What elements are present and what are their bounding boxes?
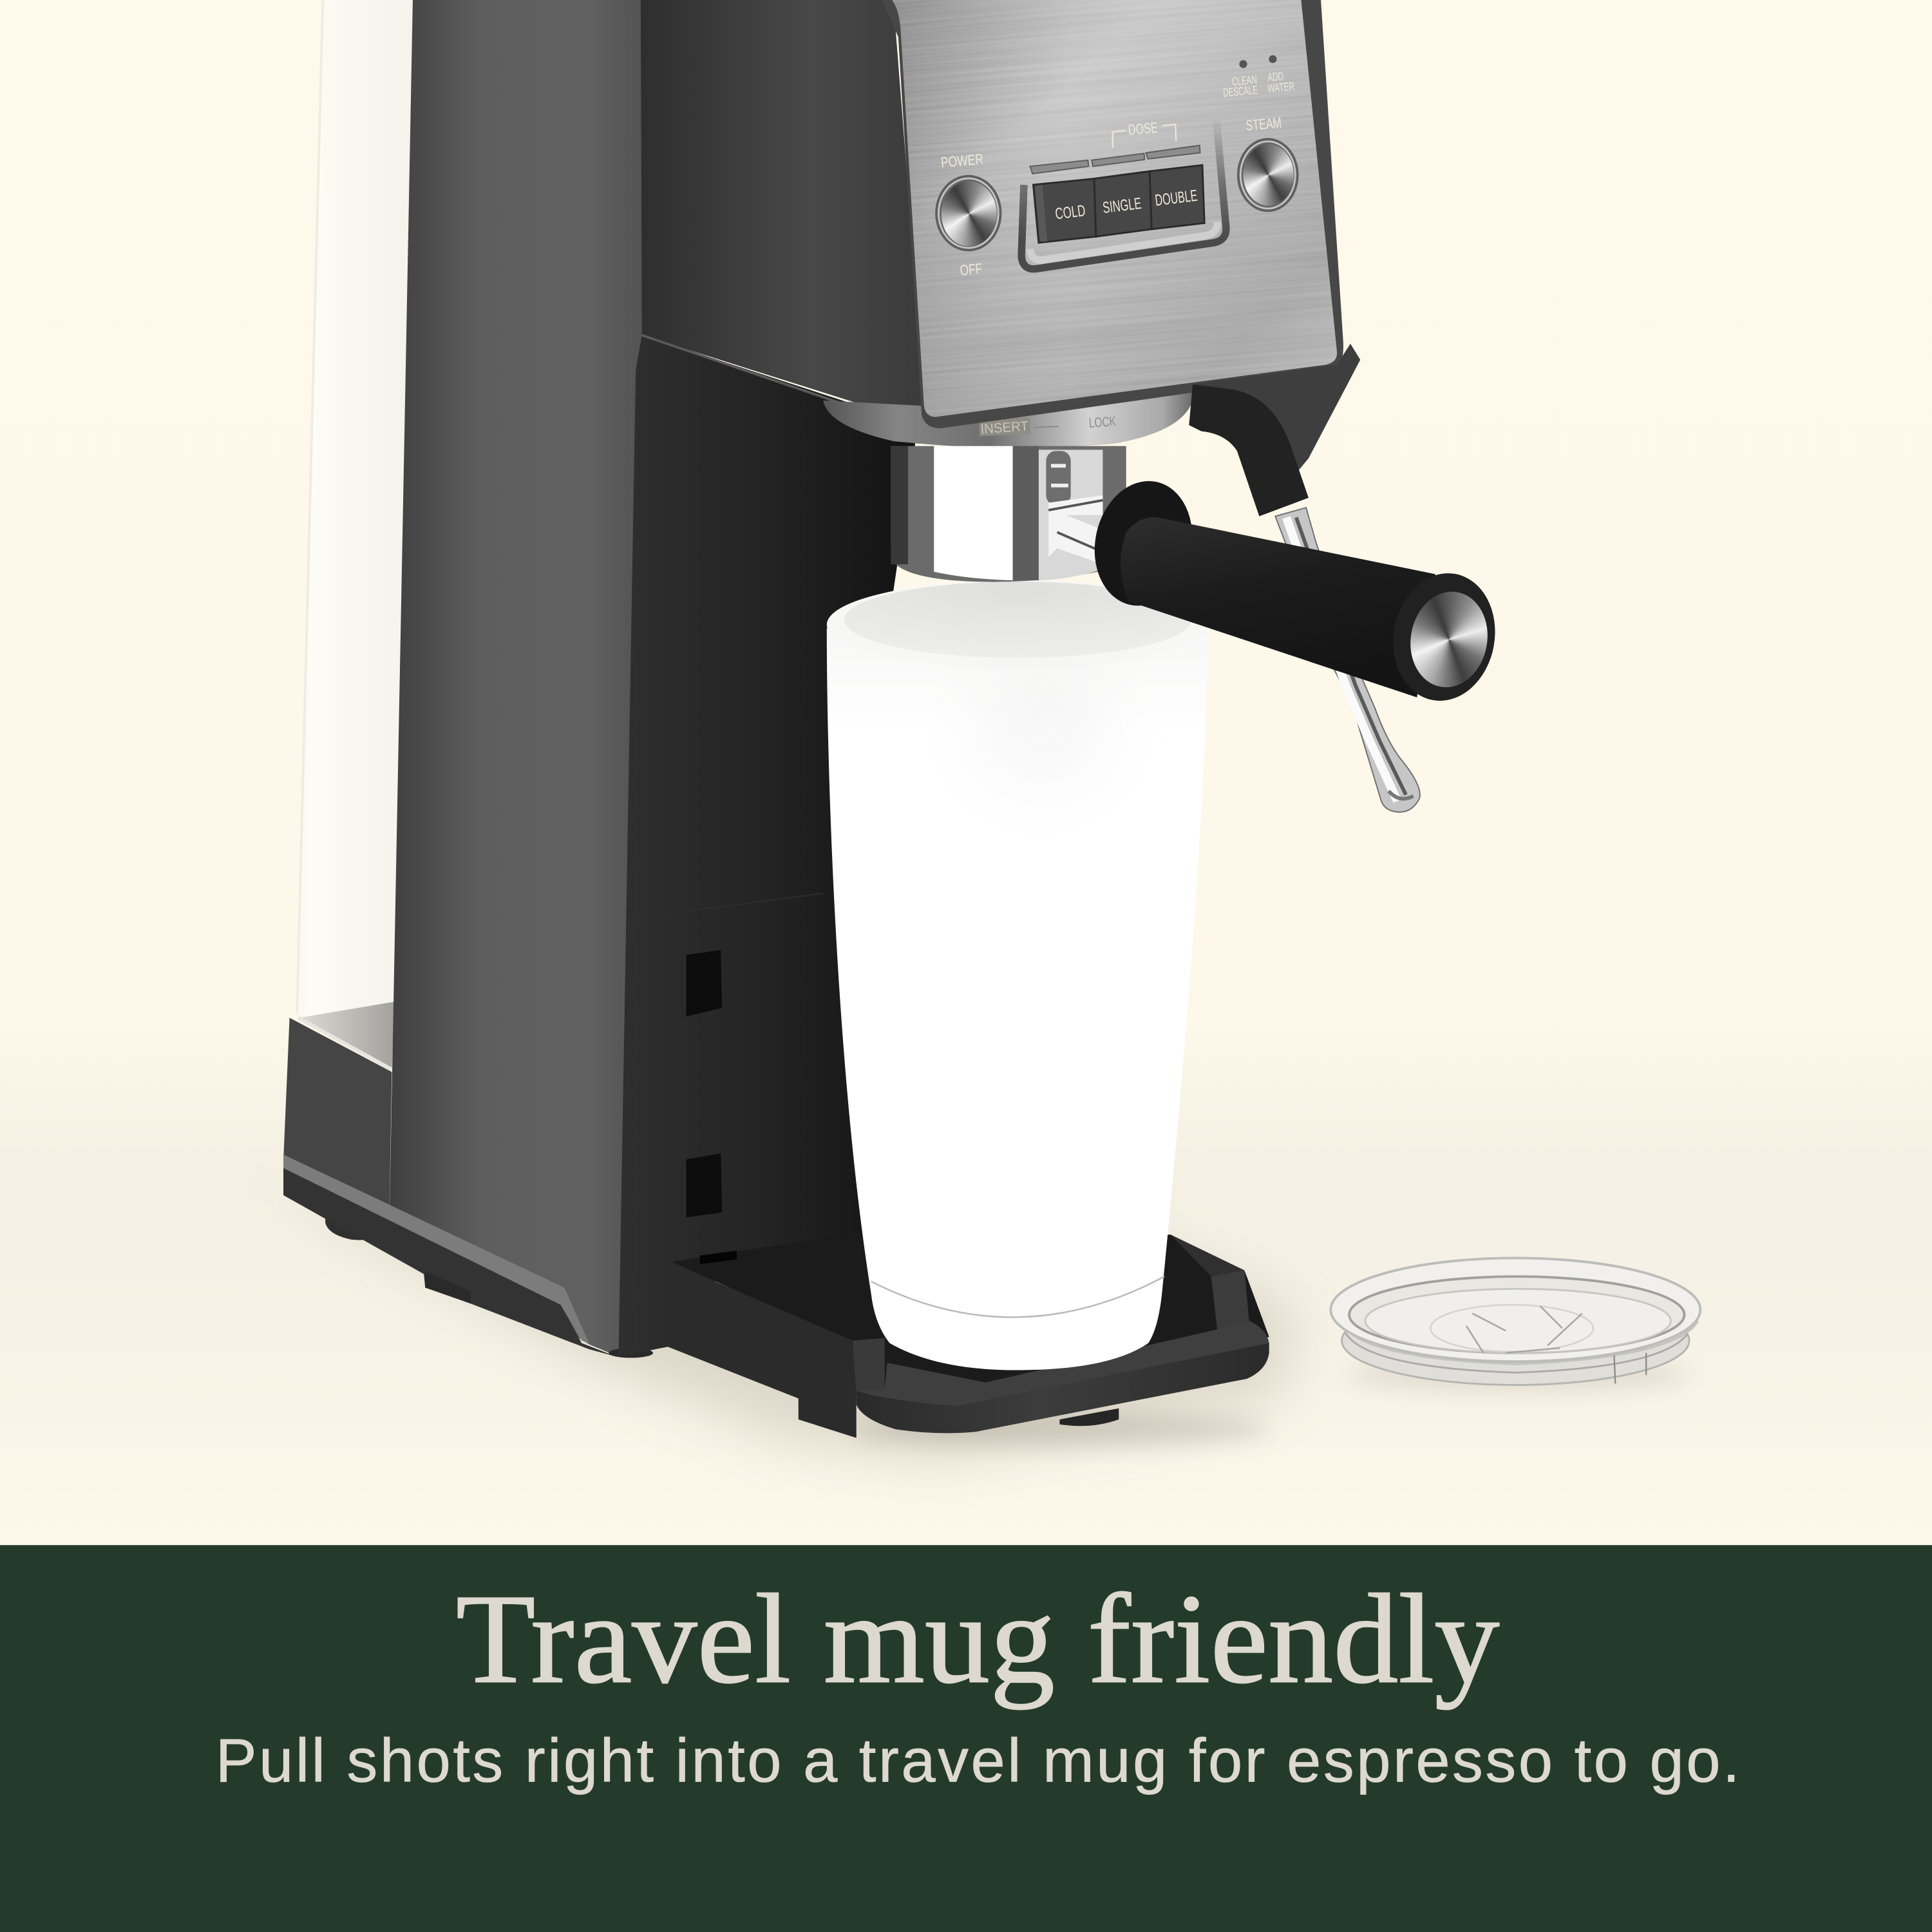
button: double (1150, 165, 1204, 229)
group head collar (823, 376, 1193, 448)
power knob (935, 175, 1001, 251)
collar labels: LOCK (1088, 414, 1117, 431)
panel labels: DOSE (1128, 119, 1159, 138)
collar labels (980, 414, 1117, 437)
floor shadows (277, 1183, 1690, 1460)
clear travel mug lid (1331, 1258, 1700, 1385)
panel labels: DESCALE (1222, 84, 1258, 99)
tray right post (1171, 1235, 1249, 1331)
button: cold: COLD (1054, 202, 1086, 223)
white travel mug (827, 580, 1208, 1370)
indicator lights (1239, 55, 1277, 68)
machine head (641, 0, 927, 431)
rear foot (325, 1214, 376, 1240)
bottom banner (0, 1545, 1932, 1932)
panel labels: WATER (1267, 80, 1295, 95)
chrome portafilter basket (891, 446, 1126, 582)
panel labels: STEAM (1245, 114, 1282, 134)
subtitle: Pull shots right into a travel mug for espresso to go. (216, 1727, 1740, 1795)
tray left rail (668, 1262, 885, 1438)
handle grip (1121, 517, 1435, 697)
steam arm bracket (1189, 344, 1360, 516)
panel labels (940, 70, 1295, 279)
collar labels: INSERT (980, 419, 1029, 437)
steam knob (1237, 138, 1299, 212)
mug base seam (871, 1276, 1164, 1317)
drip tray (668, 1232, 1269, 1438)
tray front face (857, 1343, 1269, 1433)
button: single (1094, 171, 1151, 236)
tray rim (857, 1321, 1269, 1407)
mug interior (844, 582, 1191, 658)
slot: upper tray mount (687, 950, 722, 1016)
panel labels: OFF (960, 260, 983, 279)
slot: lower tray mount (687, 1153, 722, 1217)
machine side panel (390, 0, 653, 1357)
base plinth with grey strip (283, 1155, 653, 1358)
tank base (283, 1018, 392, 1214)
button: single: SINGLE (1102, 194, 1142, 217)
panel labels: ADD (1267, 70, 1284, 84)
handle end cap (1383, 565, 1505, 709)
steel panel bezel (882, 0, 1343, 428)
machine front wall (618, 335, 918, 1357)
portafilter handle (1083, 472, 1505, 709)
cream studio background (0, 0, 1932, 1545)
chrome bracket (1048, 495, 1103, 564)
panel labels: POWER (940, 151, 984, 171)
button: double: DOUBLE (1154, 187, 1198, 209)
title: Travel mug friendly (456, 1569, 1499, 1710)
handle metal disc (1403, 585, 1495, 694)
water tank (297, 0, 419, 1072)
lid embossed logo (1430, 1305, 1593, 1353)
handle collar (1083, 472, 1204, 615)
brushed steel control panel (892, 0, 1337, 417)
dose indicator bars (1030, 146, 1200, 174)
button recess frame (1021, 117, 1226, 269)
panel labels: CLEAN (1231, 73, 1258, 88)
steam wand (1275, 507, 1420, 812)
button: cold (1033, 178, 1096, 243)
dose buttons (1033, 165, 1204, 243)
